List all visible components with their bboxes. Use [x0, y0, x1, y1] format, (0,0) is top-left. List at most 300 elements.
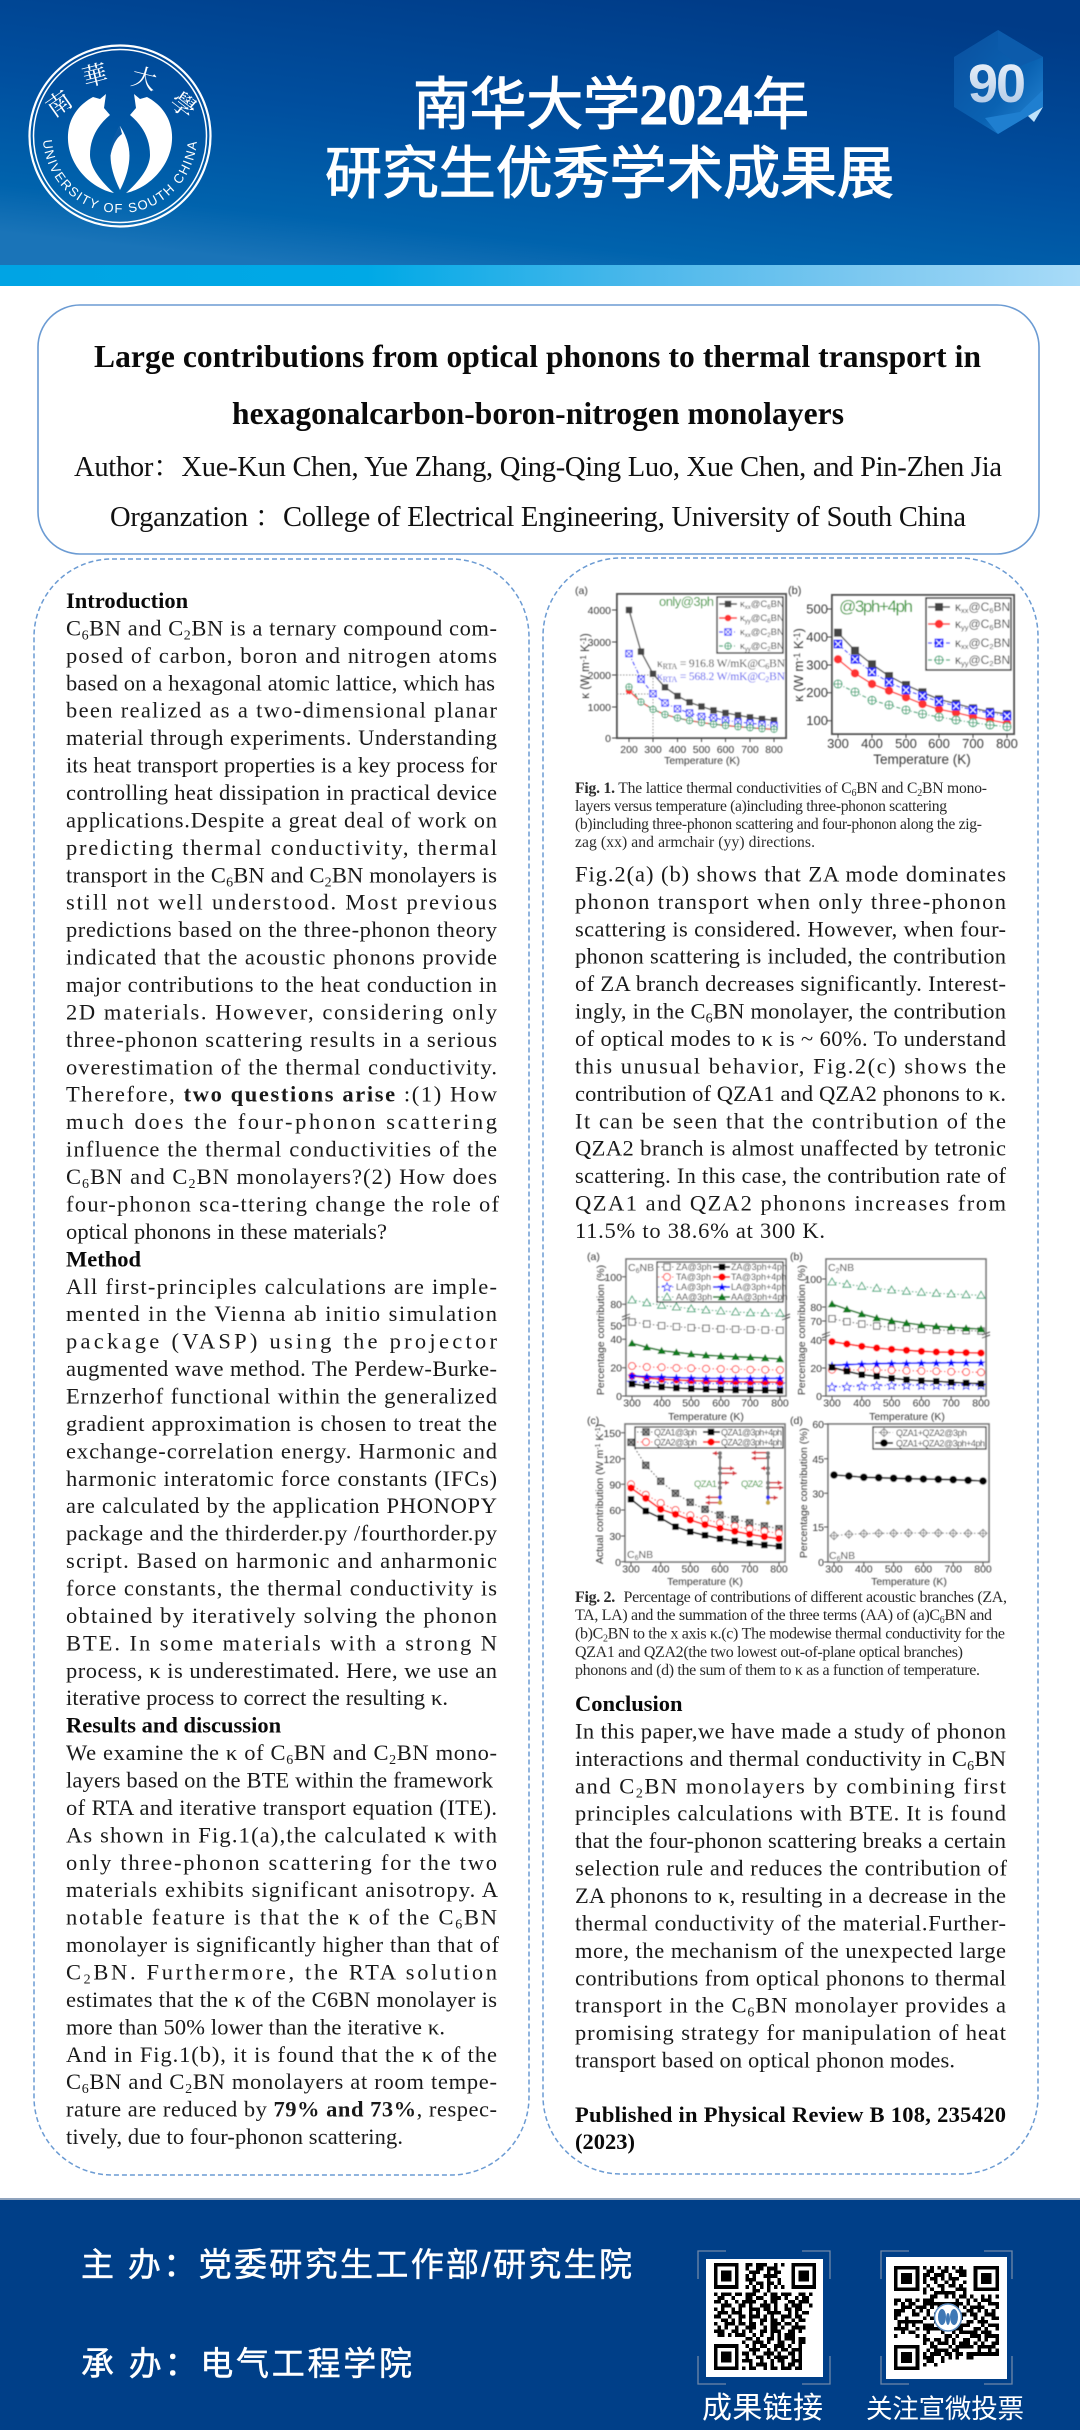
legend: 6 — [767, 619, 771, 625]
chart: Fig 1(a) thermal conductivity, three-phonon: 4000 — [588, 605, 611, 617]
chart: Fig 2(d) sum of QZA1 and QZA2: (d) — [790, 1415, 803, 1427]
chart: Fig 2(a) C6NB percentage contribution: (a) — [587, 1251, 600, 1263]
legend: BN — [771, 641, 784, 652]
inset: QZA1 and QZA2 vibration modes: QZA1 — [694, 1479, 717, 1490]
chart: Fig 2(d) sum of QZA1 and QZA2 — [790, 1415, 992, 1588]
legend: κ — [955, 653, 961, 667]
chart: Fig 2(a) C6NB percentage contribution: 0 — [616, 1391, 622, 1403]
heading: paper title: hexagonalcarbon-boron-nitrogen monolayers — [232, 396, 844, 431]
section: Results and discussion: of RTA and iterative transport equation (ITE). — [66, 1795, 497, 1820]
section: Method: package (VASP) using the projector — [66, 1329, 498, 1354]
legend: ZA@3ph — [676, 1262, 712, 1272]
chart: Fig 1(a) thermal conductivity, three-phonon: 3000 — [588, 637, 611, 649]
chart: Fig 1(a) thermal conductivity, three-phonon: 600 — [717, 744, 734, 756]
legend — [873, 1427, 986, 1449]
section: Introduction: controlling heat dissipation in practical device — [66, 780, 497, 805]
section: Introduction: 6 — [82, 628, 89, 643]
legend: AA@3ph+4ph — [731, 1292, 787, 1302]
chart: Fig 2(d) sum of QZA1 and QZA2: 30 — [812, 1488, 824, 1500]
legend: BN — [771, 627, 784, 638]
section: Conclusion: thermal conductivity of the material.Further- — [575, 1910, 1006, 1935]
caption: Fig. 2: (b)C — [575, 1626, 603, 1642]
section: Results and discussion: 2 — [84, 1972, 91, 1988]
chart: Fig 1(b) thermal conductivity, three- and four-phonon: 600 — [928, 736, 950, 751]
caption: Fig. 2: Fig. 2. Percentage of contributions of different acoustic branches (ZA, — [575, 1589, 1007, 1606]
inset: QZA1 and QZA2 vibration modes: QZA2 — [741, 1479, 763, 1490]
caption: Fig. 1: (b)including three-phonon scattering and four-phonon along the zig- — [575, 816, 982, 833]
text: Fig.2 discussion: scattering is considered. However, when four- — [575, 916, 1006, 941]
section: Results and discussion: As shown in Fig.1(a),the calculated κ with — [66, 1822, 497, 1847]
section: Results and discussion: rature are reduced by 79% and 73%, respec- — [66, 2097, 497, 2122]
icon: university seal: 南 — [38, 81, 79, 125]
icon: QR code, achievement link — [698, 2251, 830, 2384]
chart: Fig 1(a) thermal conductivity, three-phonon: κ — [657, 658, 663, 670]
section: Conclusion: transport based on optical phonon modes. — [575, 2048, 955, 2073]
text: Fig.2 discussion: of ZA branch decreases significantly. Interest- — [575, 971, 1006, 996]
legend: yy — [745, 619, 751, 625]
chart: Fig 1(a) thermal conductivity, three-phonon: only@3ph — [659, 594, 714, 609]
caption: Fig. 1: zag (xx) and armchair (yy) directions. — [575, 834, 815, 851]
legend: QZA2@3ph+4ph — [721, 1438, 782, 1448]
legend: @C — [968, 653, 990, 667]
section: Method: mented in the Vienna ab initio simulation — [66, 1301, 497, 1326]
chart: Fig 1(a) thermal conductivity, three-phonon: κ (W m — [580, 662, 592, 699]
section: Introduction: 2D materials. However, considering only — [66, 1000, 498, 1024]
chart: Fig 2(c) actual contribution of QZA1 and QZA2: 90 — [609, 1480, 621, 1492]
chart: Fig 2(d) sum of QZA1 and QZA2: 700 — [944, 1564, 962, 1576]
section: Introduction: much does the four-phonon scattering — [66, 1109, 497, 1134]
legend: QZA1@3ph — [654, 1428, 697, 1438]
legend: BN — [771, 613, 784, 624]
section: Conclusion: promising strategy for manipulation of heat — [575, 2020, 1007, 2045]
chart: Fig 2(a) C6NB percentage contribution: 300 — [623, 1398, 641, 1410]
chart: Fig 1(a) thermal conductivity, three-phonon: ) — [580, 633, 592, 637]
section: Introduction: predicting thermal conductivity, thermal — [66, 835, 497, 860]
chart: Fig 1(b) thermal conductivity, three- and four-phonon: κ (W m — [791, 661, 806, 702]
panel: paper title block — [38, 305, 1039, 554]
chart: Fig 2(a) C6NB percentage contribution: 20 — [610, 1362, 622, 1374]
text: publication reference — [575, 2102, 1006, 2154]
section: Conclusion: 6 — [747, 2006, 754, 2021]
text: Fig.2 discussion: ingly, in the C — [575, 999, 705, 1024]
section: Introduction: been realized as a two-dimensional planar — [66, 698, 498, 723]
section: Introduction: 2 — [325, 875, 332, 890]
chart: Fig 2(a) C6NB percentage contribution: 400 — [653, 1398, 671, 1410]
chart: Fig 2(c) actual contribution of QZA1 and QZA2: ) — [594, 1424, 606, 1427]
chart: Fig 1(b) thermal conductivity, three- and four-phonon: (b) — [788, 585, 801, 597]
section: Method: process, κ is underestimated. Here, we use an — [66, 1658, 497, 1683]
chart: Fig 2(b) C2NB percentage contribution — [790, 1251, 990, 1423]
chart: Fig 2(c) actual contribution of QZA1 and QZA2: NB — [638, 1549, 653, 1561]
section: Conclusion: BN monolayer provides a — [755, 1993, 1006, 2018]
section: Results and discussion: Results and discussion — [66, 1713, 282, 1738]
section: Method: augmented wave method. The Perdew-Burke- — [66, 1356, 497, 1381]
section: Introduction: 6 — [226, 875, 233, 890]
heading: paper title: Large contributions from optical phonons to thermal transport in — [94, 339, 981, 374]
chart: Fig 2(c) actual contribution of QZA1 and QZA2: 120 — [603, 1454, 621, 1466]
section: Conclusion: and C — [575, 1773, 634, 1798]
section: Introduction: its heat transport properties is a key process for — [66, 753, 498, 778]
text: Fig.2 discussion: 11.5% to 38.6% at 300 K. — [575, 1218, 825, 1243]
title: 研究生优秀学术成果展 — [325, 143, 894, 206]
section: Introduction: BN monolayers is — [332, 862, 497, 887]
section: Method: gradient approximation is chosen to treat the — [66, 1411, 497, 1436]
chart: Fig 2(c) actual contribution of QZA1 and QZA2: C — [627, 1549, 635, 1561]
chart: Fig 2(a) C6NB percentage contribution: 80 — [610, 1299, 622, 1311]
section: Results and discussion — [66, 1713, 500, 2149]
chart: Fig 2(a) C6NB percentage contribution: 6 — [636, 1268, 640, 1275]
chart: Fig 1(a) thermal conductivity, three-phonon: 1000 — [588, 702, 611, 714]
section: Introduction: 2 — [184, 628, 191, 643]
caption: Fig. 2: 6 — [940, 1615, 945, 1626]
text: organizers: 承 办：电气工程学院 — [81, 2345, 412, 2382]
text: Fig.2 discussion: scattering. In this case, the contribution rate of — [575, 1163, 1006, 1188]
text: authors and organization — [74, 452, 1002, 533]
chart: Fig 2(c) actual contribution of QZA1 and QZA2: 400 — [652, 1564, 670, 1576]
chart: Fig 1(a) thermal conductivity, three-phonon: κ — [657, 671, 663, 683]
text: Fig.2 discussion: QZA2 branch is almost unaffected by tetronic — [575, 1136, 1006, 1161]
section: Introduction: optical phonons in these materials? — [66, 1219, 387, 1244]
section: Results and discussion: C — [66, 2069, 81, 2094]
legend: LA@3ph — [676, 1282, 711, 1292]
section: Introduction: Introduction — [66, 588, 189, 613]
chart: Fig 2(c) actual contribution of QZA1 and QZA2: 6 — [635, 1555, 639, 1562]
footer band — [0, 2198, 1080, 2430]
chart: Fig 2(d) sum of QZA1 and QZA2: 60 — [812, 1419, 824, 1431]
chart: Fig 2(b) C2NB percentage contribution: 400 — [853, 1398, 871, 1410]
chart: Fig 2(d) sum of QZA1 and QZA2: Temperature (K) — [871, 1576, 947, 1588]
section: Results and discussion: tively, due to four-phonon scattering. — [66, 2124, 403, 2149]
section: Results and discussion: monolayer is significantly higher than that of — [66, 1932, 500, 1957]
section: Introduction: material through experiments. Understanding — [66, 725, 497, 750]
legend: 2 — [767, 647, 771, 653]
chart: Fig 1(a) thermal conductivity, three-phonon: 400 — [669, 744, 686, 756]
chart: Fig 2(b) C2NB percentage contribution: NB — [840, 1262, 854, 1274]
figure 2 — [587, 1251, 992, 1588]
section: Introduction: C — [66, 1164, 81, 1189]
chart: Fig 2(b) C2NB percentage contribution: (b) — [790, 1251, 803, 1263]
section: Conclusion: transport in the C — [575, 1993, 747, 2018]
section: Introduction: indicated that the acoustic phonons provide — [66, 945, 497, 970]
chart: Fig 2(b) C2NB percentage contribution: Percentage contribution (%) — [796, 1265, 808, 1395]
section: Method: package and the thirderder.py /fourthorder.py — [66, 1521, 498, 1546]
section: Method: exchange-correlation energy. Harmonic and — [66, 1438, 497, 1463]
section: Introduction: overestimation of the thermal conductivity. — [66, 1054, 497, 1079]
chart: Fig 1(a) thermal conductivity, three-phonon: 6 — [765, 662, 769, 671]
chart: Fig 2(c) actual contribution of QZA1 and QZA2: 150 — [603, 1428, 621, 1440]
icon: university seal — [28, 44, 212, 228]
chart: Fig 2(d) sum of QZA1 and QZA2: 600 — [915, 1564, 932, 1576]
text: publication reference: (2023) — [575, 2129, 635, 2154]
legend: @C — [751, 613, 767, 624]
legend: @C — [968, 600, 990, 614]
legend: @C — [968, 617, 990, 631]
chart: Fig 2(c) actual contribution of QZA1 and QZA2: -1 — [595, 1443, 602, 1450]
section: Conclusion: 6 — [967, 1759, 974, 1774]
caption: Fig. 1: 6 — [851, 788, 856, 799]
section: Introduction: four-phonon sca-ttering change the role of — [66, 1192, 500, 1216]
legend: BN — [771, 599, 784, 610]
section: Introduction: Therefore, two questions arise :(1) How — [66, 1082, 498, 1107]
chart: Fig 1(a) thermal conductivity, three-phonon: Temperature (K) — [664, 755, 740, 767]
section: Conclusion: that the four-phonon scattering breaks a certain — [575, 1828, 1006, 1853]
section: Conclusion: BN monolayers by combining first — [644, 1773, 1007, 1798]
chart: Fig 1(a) thermal conductivity, three-phonon: -1 — [579, 655, 588, 662]
chart: Fig 1(a) thermal conductivity, three-phonon: (a) — [575, 585, 588, 597]
legend: κ — [740, 627, 745, 638]
chart: Fig 2(a) C6NB percentage contribution: Temperature (K) — [668, 1411, 744, 1423]
chart: Fig 2(b) C2NB percentage contribution: 80 — [810, 1302, 822, 1314]
chart: Fig 1(a) thermal conductivity, three-phonon: K — [580, 644, 592, 655]
section: Results and discussion: estimates that the κ of the C6BN monolayer is — [66, 1987, 497, 2012]
section: Results and discussion: C — [66, 1960, 81, 1984]
legend: TA@3ph — [676, 1272, 711, 1282]
icon: hexagon badge 90 — [954, 30, 1043, 134]
text: Fig.2 discussion: phonon transport when only three-phonon — [575, 889, 1006, 914]
section: Conclusion: BN — [974, 1746, 1006, 1771]
chart: Fig 1(a) thermal conductivity, three-phonon: = 568.2 W/mK@C — [677, 671, 766, 683]
legend — [657, 1262, 787, 1302]
section: Results and discussion: 2 — [389, 1753, 396, 1768]
text: Fig.2 discussion: BN monolayer, the contribution — [713, 999, 1006, 1024]
title — [325, 74, 894, 206]
chart: Fig 2(b) C2NB percentage contribution: 500 — [883, 1398, 901, 1410]
section: Conclusion: selection rule and reduces the contribution of — [575, 1856, 1008, 1881]
section: Results and discussion: materials exhibits significant anisotropy. A — [66, 1877, 499, 1902]
caption: Fig. 2: QZA1 and QZA2(the two lowest out-of-plane optical branches) — [575, 1644, 963, 1661]
section: Introduction: BN and C — [90, 1164, 187, 1189]
section: Conclusion: principles calculations with BTE. It is found — [575, 1801, 1006, 1826]
chart: Fig 1(b) thermal conductivity, three- and four-phonon: K — [791, 640, 806, 653]
section: Introduction: 2 — [188, 1177, 195, 1192]
panel: left column — [34, 559, 529, 2175]
caption: Fig. 1: BN and C — [856, 780, 917, 797]
legend: BN — [994, 617, 1010, 631]
chart: Fig 1(b) thermal conductivity, three- and four-phonon: 300 — [806, 658, 828, 672]
chart: Fig 1(a) thermal conductivity, three-phonon: 2000 — [588, 670, 611, 682]
legend — [635, 1427, 783, 1448]
legend: 2 — [989, 642, 994, 651]
icon: university seal: 大 — [128, 57, 161, 98]
chart: Fig 2(d) sum of QZA1 and QZA2: NB — [840, 1550, 855, 1562]
legend: xx — [961, 606, 969, 615]
section: Conclusion: more, the mechanism of the unexpected large — [575, 1938, 1006, 1963]
chart: Fig 2(d) sum of QZA1 and QZA2: Percentage contribution (%) — [798, 1428, 810, 1558]
text: publication reference: Published in Physical Review B 108, 235420 — [575, 2102, 1006, 2127]
section: Introduction: BN is a ternary compound com- — [191, 615, 497, 640]
caption: Fig. 1: Fig. 1. The lattice thermal conductivities of C — [575, 780, 852, 797]
figure 1 — [575, 585, 1018, 767]
section: Results and discussion: BN. Furthermore, the RTA solution — [93, 1960, 497, 1984]
chart: Fig 1(a) thermal conductivity, three-phonon: 700 — [741, 744, 759, 756]
legend: BN — [994, 653, 1010, 667]
chart: Fig 2(b) C2NB percentage contribution: 100 — [804, 1274, 822, 1286]
caption: Fig. 2: BN to the x axis κ.(c) The modewise thermal conductivity for the — [608, 1626, 1005, 1642]
legend: AA@3ph — [676, 1292, 712, 1302]
caption: Fig. 1: BN mono- — [922, 780, 987, 797]
chart: Fig 2(a) C6NB percentage contribution: 50 — [610, 1320, 622, 1332]
section: Method: are calculated by the application PHONOPY — [66, 1493, 497, 1518]
caption: Fig. 2: BN and — [944, 1607, 992, 1624]
chart: Fig 1(a) thermal conductivity, three-phonon: 500 — [693, 744, 710, 756]
chart: Fig 1(b) thermal conductivity, three- and four-phonon: 200 — [806, 685, 828, 700]
section: Conclusion: In this paper,we have made a study of phonon — [575, 1718, 1006, 1743]
chart: Fig 1(b) thermal conductivity, three- and four-phonon: 100 — [806, 713, 828, 728]
chart: Fig 2(a) C6NB percentage contribution: 600 — [712, 1398, 730, 1410]
title: 南华大学2024年 — [413, 74, 809, 137]
chart: Fig 2(c) actual contribution of QZA1 and QZA2: 0 — [615, 1557, 621, 1569]
chart: Fig 2(a) C6NB percentage contribution: 700 — [741, 1398, 759, 1410]
chart: Fig 1(b) thermal conductivity, three- and four-phonon: @3ph+4ph — [839, 597, 913, 616]
legend: QZA1+QZA2@3ph — [896, 1428, 967, 1438]
chart: Fig 2(b) C2NB percentage contribution: 70 — [810, 1316, 822, 1328]
chart: Fig 1(b) thermal conductivity, three- and four-phonon: 800 — [996, 736, 1018, 751]
chart: Fig 1(a) thermal conductivity, three-phonon — [575, 585, 786, 767]
chart: Fig 1(b) thermal conductivity, three- and four-phonon: 400 — [806, 630, 828, 644]
chart: Fig 2(c) actual contribution of QZA1 and QZA2: 600 — [711, 1564, 729, 1576]
icon: hexagon badge 90: 90 — [968, 54, 1026, 114]
chart: Fig 2(b) C2NB percentage contribution: 0 — [816, 1391, 822, 1403]
section: Method: harmonic interatomic force constants (IFCs) — [66, 1466, 497, 1491]
chart: Fig 2(d) sum of QZA1 and QZA2: 500 — [885, 1564, 903, 1576]
legend: κ — [955, 600, 961, 614]
legend: xx — [745, 605, 751, 611]
legend: κ — [740, 613, 745, 624]
caption: Fig. 1 — [575, 780, 987, 851]
text: Fig.2 discussion: phonon scattering is included, the contribution — [575, 944, 1006, 969]
inset: QZA1 and QZA2 vibration modes — [694, 1451, 783, 1505]
section: Method: script. Based on harmonic and anharmonic — [66, 1548, 497, 1573]
chart: Fig 2(b) C2NB percentage contribution: C — [828, 1262, 836, 1274]
legend: yy — [961, 623, 969, 632]
text: authors and organization: Organzation ：College of Electrical Engineering, University of South China — [110, 502, 966, 533]
text: organizers — [81, 2246, 632, 2382]
chart: Fig 2(a) C6NB percentage contribution: 100 — [604, 1272, 622, 1284]
chart: Fig 1(b) thermal conductivity, three- and four-phonon: ) — [791, 628, 806, 632]
chart: Fig 2(b) C2NB percentage contribution: Temperature (K) — [869, 1411, 945, 1423]
section: Method — [66, 1246, 498, 1710]
chart: Fig 2(c) actual contribution of QZA1 and QZA2: 700 — [741, 1564, 759, 1576]
text: authors and organization: Author：Xue-Kun Chen, Yue Zhang, Qing-Qing Luo, Xue Chen, and Pin-Zhen Jia — [74, 452, 1002, 483]
chart: Fig 2(a) C6NB percentage contribution: NB — [640, 1262, 654, 1274]
legend: κ — [740, 641, 745, 652]
text: Fig.2 discussion: Fig.2(a) (b) shows that ZA mode dominates — [575, 861, 1006, 886]
text: QR captions: 成果链接 — [702, 2392, 823, 2425]
section: Method: Method — [66, 1246, 141, 1271]
legend: QZA1@3ph+4ph — [721, 1428, 782, 1438]
section: Conclusion: 2 — [636, 1786, 643, 1801]
legend: xx — [961, 642, 969, 651]
section: Introduction: transport in the C — [66, 862, 226, 887]
section: Conclusion: interactions and thermal conductivity in C — [575, 1746, 967, 1771]
chart: Fig 2(c) actual contribution of QZA1 and QZA2: Actual contribution (W m — [594, 1450, 606, 1564]
chart: Fig 1(a) thermal conductivity, three-phonon: 0 — [605, 733, 611, 745]
icon: QR code, official account voting — [881, 2251, 1012, 2384]
text: QR captions: 关注宣微投票 — [866, 2394, 1024, 2424]
section: Results and discussion: 6 — [82, 2082, 89, 2097]
icon: university seal: 學 — [163, 82, 205, 126]
section: Results and discussion: 2 — [185, 2082, 192, 2097]
chart: Fig 1(b) thermal conductivity, three- and four-phonon: Temperature (K) — [873, 752, 971, 767]
legend: κ — [955, 636, 961, 650]
chart: Fig 2(c) actual contribution of QZA1 and QZA2: 800 — [770, 1564, 788, 1576]
legend — [926, 598, 1011, 670]
chart: Fig 1(a) thermal conductivity, three-phonon: RTA — [663, 662, 677, 671]
chart: Fig 2(b) C2NB percentage contribution: 800 — [972, 1398, 990, 1410]
section: Results and discussion: notable feature is that the κ of the C — [66, 1905, 453, 1930]
text: Fig.2 discussion: this unusual behavior, Fig.2(c) shows the — [575, 1053, 1006, 1078]
chart: Fig 2(b) C2NB percentage contribution: 40 — [810, 1335, 822, 1347]
section: Method: force constants, the thermal conductivity is — [66, 1576, 497, 1600]
text: Fig.2 discussion: contribution of QZA1 and QZA2 phonons to κ. — [575, 1081, 1006, 1106]
chart: Fig 1(b) thermal conductivity, three- and four-phonon: 700 — [962, 736, 984, 751]
text: Fig.2 discussion: 6 — [706, 1012, 713, 1027]
chart: Fig 2(d) sum of QZA1 and QZA2: 15 — [812, 1522, 824, 1534]
chart: Fig 2(c) actual contribution of QZA1 and QZA2 — [587, 1415, 788, 1588]
chart: Fig 2(b) C2NB percentage contribution: 600 — [913, 1398, 930, 1410]
icon: university seal: 華 — [78, 54, 111, 95]
legend: @C — [751, 599, 767, 610]
chart: Fig 1(a) thermal conductivity, three-phonon: RTA — [663, 675, 677, 684]
chart: Fig 2(d) sum of QZA1 and QZA2: 6 — [837, 1556, 841, 1563]
chart: Fig 2(d) sum of QZA1 and QZA2: 400 — [855, 1564, 873, 1576]
legend: @C — [751, 641, 767, 652]
section: Results and discussion: BN mono- — [397, 1740, 497, 1765]
section: Introduction: BN monolayers?(2) How does — [197, 1164, 497, 1189]
chart: Fig 2(c) actual contribution of QZA1 and QZA2: (c) — [587, 1415, 599, 1427]
chart: Fig 2(a) C6NB percentage contribution: Percentage contribution (%) — [595, 1265, 607, 1395]
chart: Fig 1(a) thermal conductivity, three-phonon: = 916.8 W/mK@C — [677, 658, 766, 670]
legend: 6 — [767, 605, 771, 611]
section: Method: All first-principles calculations are imple- — [66, 1274, 497, 1299]
legend: 6 — [989, 606, 994, 615]
section: Introduction: influence the thermal conductivities of the — [66, 1137, 497, 1162]
chart: Fig 2(c) actual contribution of QZA1 and QZA2: 500 — [682, 1564, 699, 1576]
header banner — [0, 0, 1080, 286]
chart: Fig 2(c) actual contribution of QZA1 and QZA2: 60 — [609, 1505, 621, 1517]
section: Results and discussion: BN and C — [294, 1740, 388, 1765]
section: Method: Ernzerhof functional within the generalized — [66, 1384, 497, 1408]
caption: Fig. 1: layers versus temperature (a)including three-phonon scattering — [575, 798, 947, 815]
chart: Fig 2(a) C6NB percentage contribution: 40 — [610, 1334, 622, 1346]
heading: paper title — [94, 339, 981, 431]
chart: Fig 2(a) C6NB percentage contribution: 800 — [771, 1398, 789, 1410]
caption: Fig. 2: 2 — [603, 1634, 608, 1644]
chart: Fig 2(c) actual contribution of QZA1 and QZA2: 30 — [609, 1531, 621, 1543]
caption: Fig. 2: TA, LA) and the summation of the three terms (AA) of (a)C — [575, 1607, 940, 1624]
section: Introduction: major contributions to the heat conduction in — [66, 972, 497, 997]
chart: Fig 1(b) thermal conductivity, three- and four-phonon: -1 — [792, 653, 802, 661]
caption: Fig. 1: 2 — [917, 788, 922, 799]
section: Introduction — [66, 588, 500, 1244]
section: Introduction: still not well understood. Most previous — [66, 890, 497, 915]
section: Introduction: 6 — [82, 1177, 89, 1192]
text: Fig.2 discussion: QZA1 and QZA2 phonons increases from — [575, 1191, 1006, 1216]
section: Results and discussion: BN and C — [89, 2069, 184, 2094]
section: Results and discussion: And in Fig.1(b), it is found that the κ of the — [66, 2042, 497, 2067]
section: Introduction: C — [66, 615, 81, 640]
legend: @C — [751, 627, 767, 638]
text: Fig.2 discussion: of optical modes to κ is ~ 60%. To understand — [575, 1026, 1006, 1051]
text: Fig.2 discussion: It can be seen that the contribution of the — [575, 1108, 1006, 1133]
legend: 2 — [767, 633, 771, 639]
section: Method: BTE. In some materials with a strong N — [66, 1630, 497, 1655]
chart: Fig 1(a) thermal conductivity, three-phonon: -1 — [579, 637, 588, 644]
chart: Fig 2(b) C2NB percentage contribution: 300 — [823, 1398, 841, 1410]
chart: Fig 2(c) actual contribution of QZA1 and QZA2: -1 — [595, 1427, 602, 1434]
legend: @C — [968, 636, 990, 650]
section: Introduction: BN and C — [89, 615, 183, 640]
